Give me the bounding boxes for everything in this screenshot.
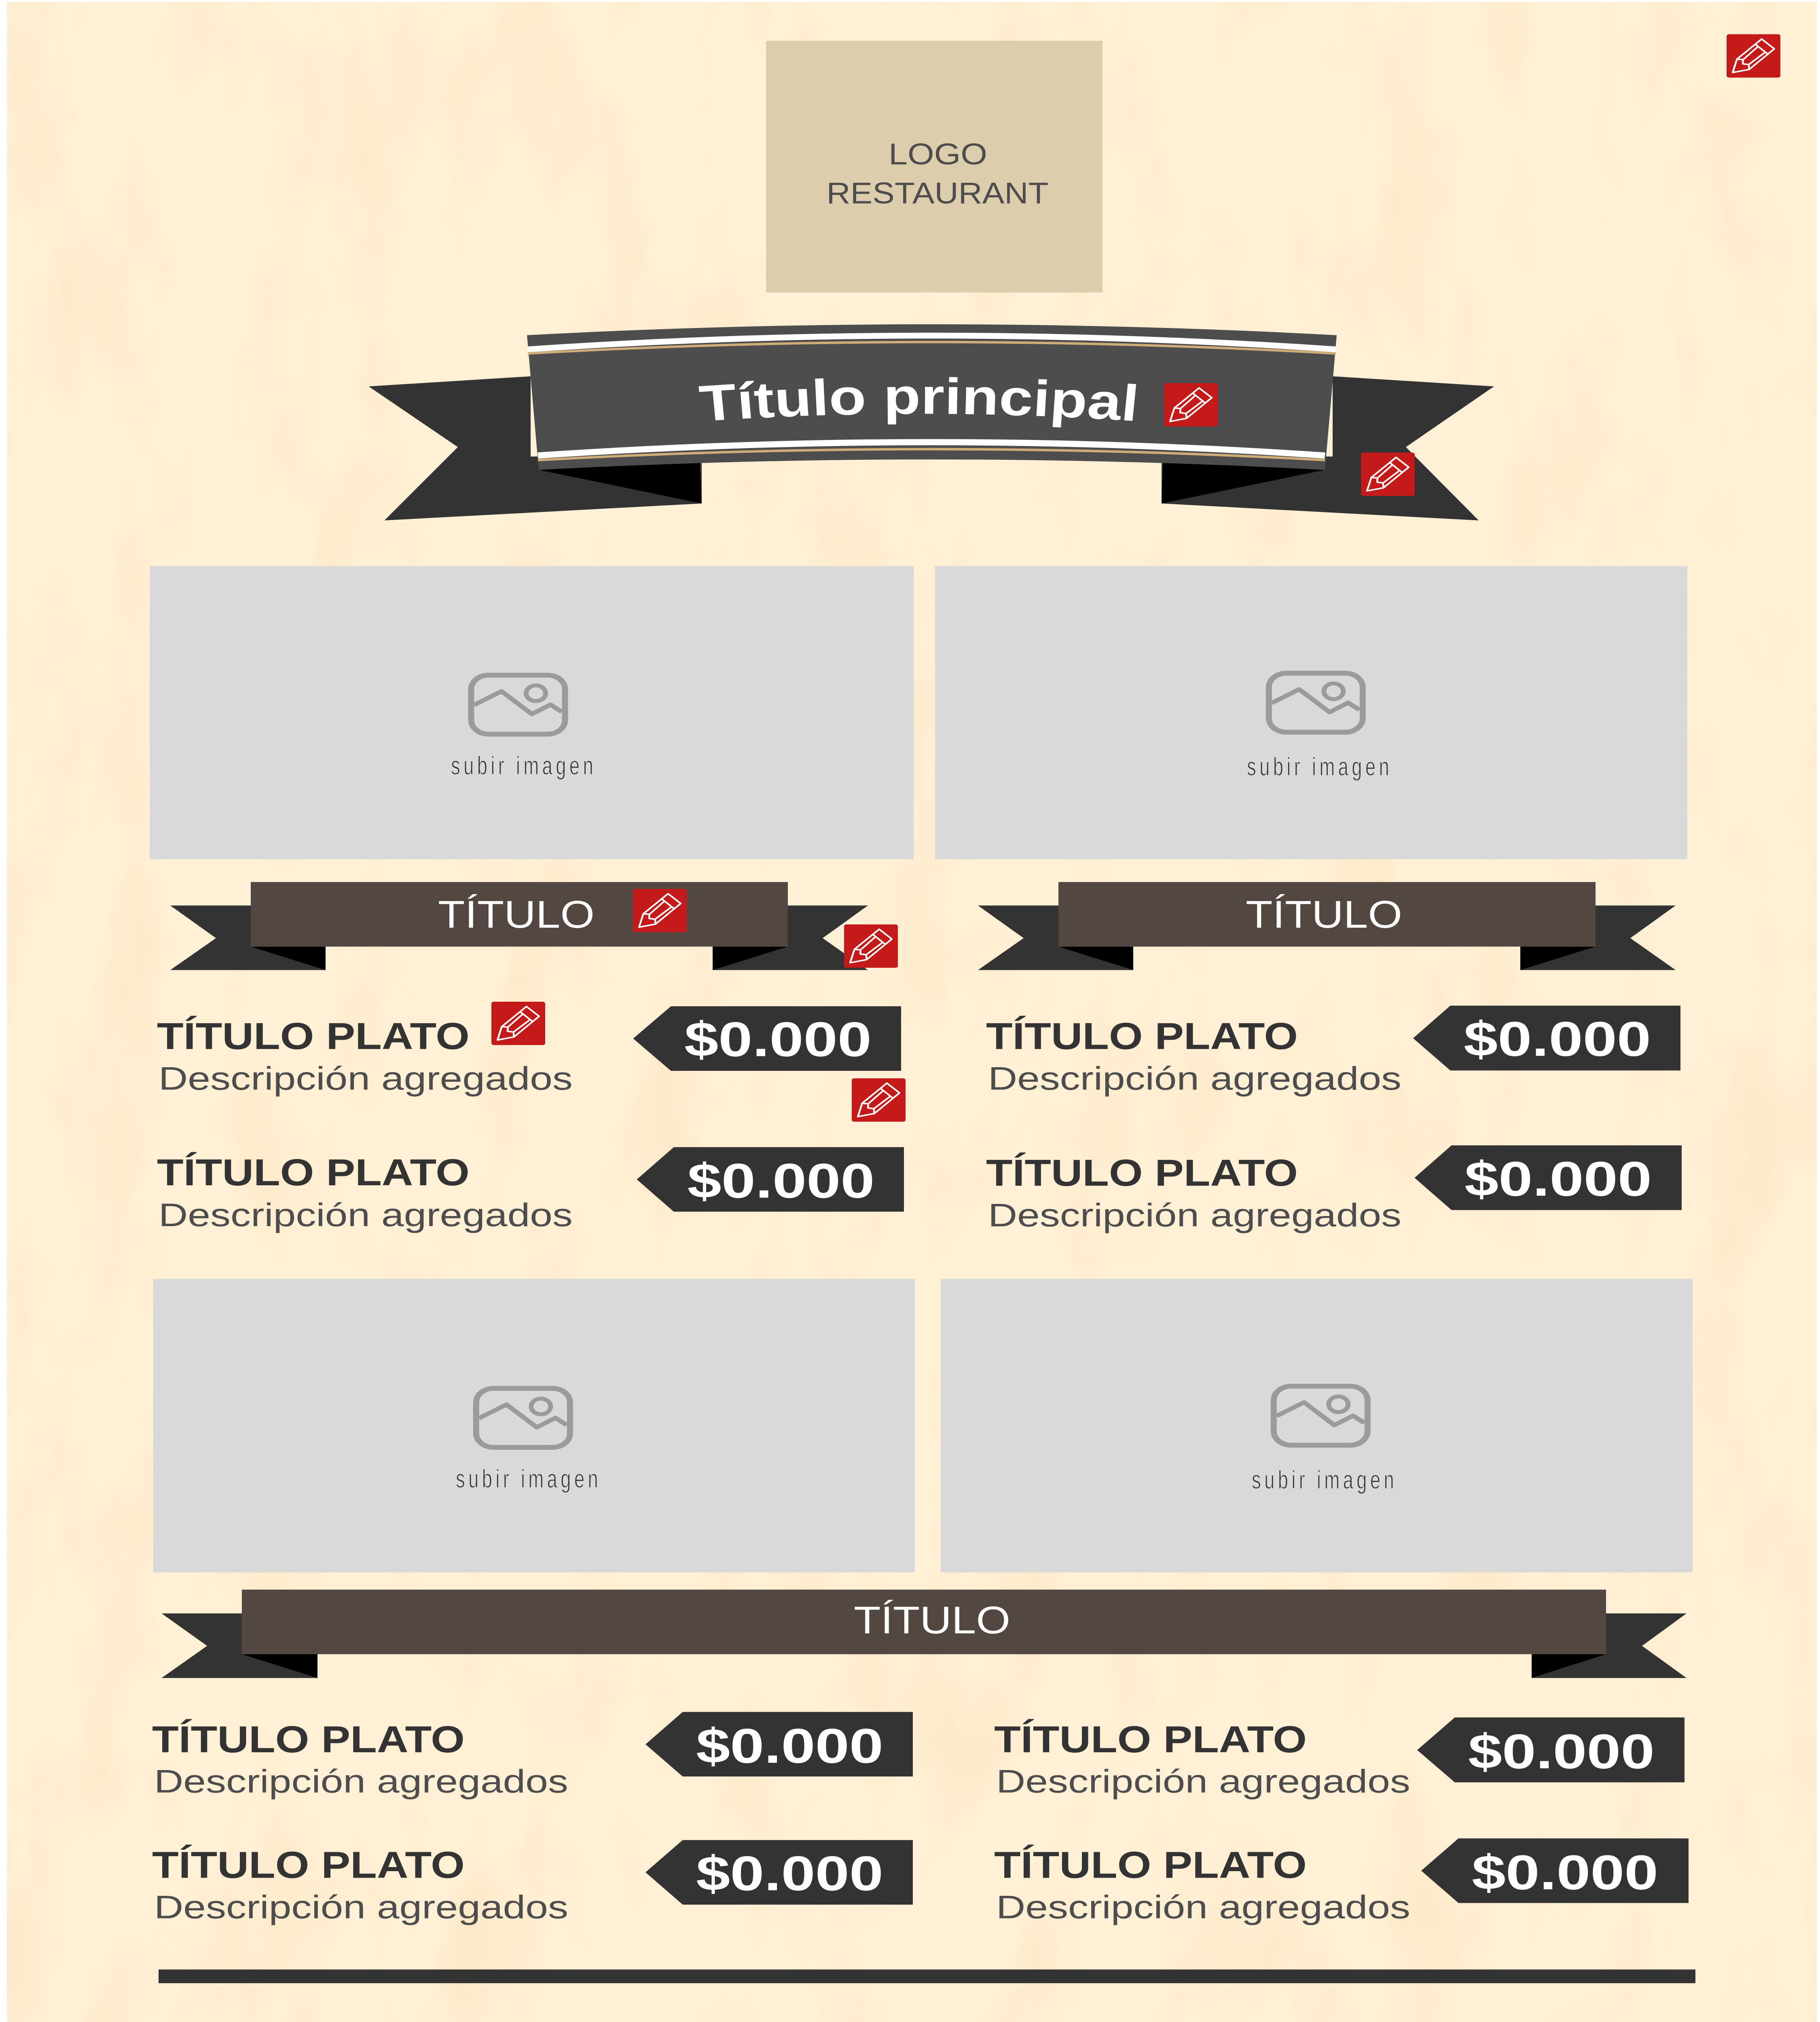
menu item 2: TÍTULO PLATO: [157, 1152, 470, 1193]
menu item 5: Descripción agregados: [154, 1763, 568, 1800]
price tag 5: $0.000: [696, 1719, 883, 1773]
price tag 8: [1421, 1838, 1689, 1903]
logo placeholder: RESTAURANT: [827, 176, 1048, 210]
price tag 2: $0.000: [687, 1153, 874, 1208]
footer bar: [159, 1969, 1695, 1983]
icon: picture: [476, 1388, 570, 1447]
menu item 5: TÍTULO PLATO: [152, 1719, 465, 1761]
price tag 7: [1417, 1717, 1685, 1782]
upload label: subir imagen: [1252, 1466, 1397, 1494]
icon: edit section ribbon: [844, 924, 898, 968]
ribbon text: TÍTULO: [438, 893, 595, 936]
menu item 8: TÍTULO PLATO: [994, 1844, 1307, 1886]
ribbon folds: [251, 947, 788, 970]
icon: edit ribbon: [1361, 453, 1415, 496]
main title text: Título principal: [697, 368, 1141, 432]
price tag 1: [633, 1006, 901, 1071]
menu item 3: TÍTULO PLATO: [986, 1015, 1298, 1057]
ribbon folds: [242, 1654, 1606, 1678]
section ribbon 1: [170, 882, 868, 970]
menu item 6: Descripción agregados: [154, 1889, 568, 1925]
logo placeholder: [766, 41, 1103, 292]
menu item 4: TÍTULO PLATO: [986, 1152, 1298, 1194]
ribbon stripes: [528, 336, 1336, 460]
price tag 5: [645, 1712, 913, 1777]
icon: edit dish: [491, 1002, 545, 1045]
section ribbon 3: [162, 1590, 1687, 1678]
ribbon tails: [170, 905, 868, 970]
upload label: subir imagen: [1247, 753, 1393, 781]
upload label: subir imagen: [456, 1465, 601, 1493]
ribbon tails: [978, 905, 1676, 970]
price tag 6: $0.000: [696, 1846, 883, 1901]
price tag 3: [1413, 1006, 1680, 1070]
image placeholder 3: [153, 1279, 915, 1572]
ribbon text: TÍTULO: [854, 1599, 1010, 1641]
ribbon tails: [162, 1614, 1687, 1678]
menu item 6: TÍTULO PLATO: [152, 1844, 465, 1886]
image placeholder 1: [150, 566, 914, 859]
ribbon tails: [369, 376, 1494, 520]
menu item 8: Descripción agregados: [996, 1889, 1410, 1925]
ribbon text: TÍTULO: [1246, 893, 1402, 936]
icon: edit page: [1727, 34, 1780, 78]
price tag 8: $0.000: [1472, 1845, 1658, 1900]
price tag 4: [1415, 1145, 1682, 1210]
menu item 5: [152, 1719, 568, 1800]
price tag 4: $0.000: [1464, 1152, 1652, 1206]
price tag 3: $0.000: [1464, 1012, 1651, 1066]
ribbon band: [251, 882, 788, 947]
logo placeholder: LOGO: [889, 137, 987, 171]
icon: edit title: [1164, 383, 1218, 427]
ribbon folds: [539, 461, 1325, 503]
image placeholder 2: [935, 566, 1687, 859]
ribbon folds: [1058, 947, 1596, 970]
price tag 7: $0.000: [1468, 1724, 1655, 1779]
menu item 7: TÍTULO PLATO: [994, 1719, 1307, 1761]
main title ribbon: [369, 324, 1494, 520]
icon: edit section title: [633, 889, 687, 932]
image placeholder 4: [941, 1279, 1693, 1572]
menu item 4: Descripción agregados: [988, 1197, 1401, 1233]
upload label: subir imagen: [451, 752, 597, 780]
menu item 1: [157, 1015, 573, 1097]
icon: edit price: [852, 1079, 906, 1122]
icon: picture: [1274, 1386, 1367, 1445]
menu item 4: [986, 1152, 1401, 1233]
menu item 6: [152, 1844, 568, 1925]
menu item 3: Descripción agregados: [988, 1061, 1401, 1097]
menu item 1: Descripción agregados: [159, 1061, 573, 1097]
price tag 2: [637, 1147, 904, 1212]
menu item 7: Descripción agregados: [996, 1763, 1410, 1800]
ribbon band: [527, 324, 1337, 470]
menu item 2: [157, 1152, 573, 1233]
ribbon band: [242, 1590, 1606, 1654]
icon: picture: [471, 675, 565, 734]
menu item 2: Descripción agregados: [159, 1197, 573, 1233]
price tag 6: [645, 1840, 913, 1905]
menu item 1: TÍTULO PLATO: [157, 1015, 470, 1057]
ribbon band: [1058, 882, 1596, 947]
menu item 8: [994, 1844, 1410, 1925]
menu item 3: [986, 1015, 1401, 1097]
section ribbon 2: [978, 882, 1676, 970]
price tag 1: $0.000: [684, 1012, 872, 1066]
menu item 7: [994, 1719, 1410, 1800]
icon: picture: [1269, 673, 1363, 732]
